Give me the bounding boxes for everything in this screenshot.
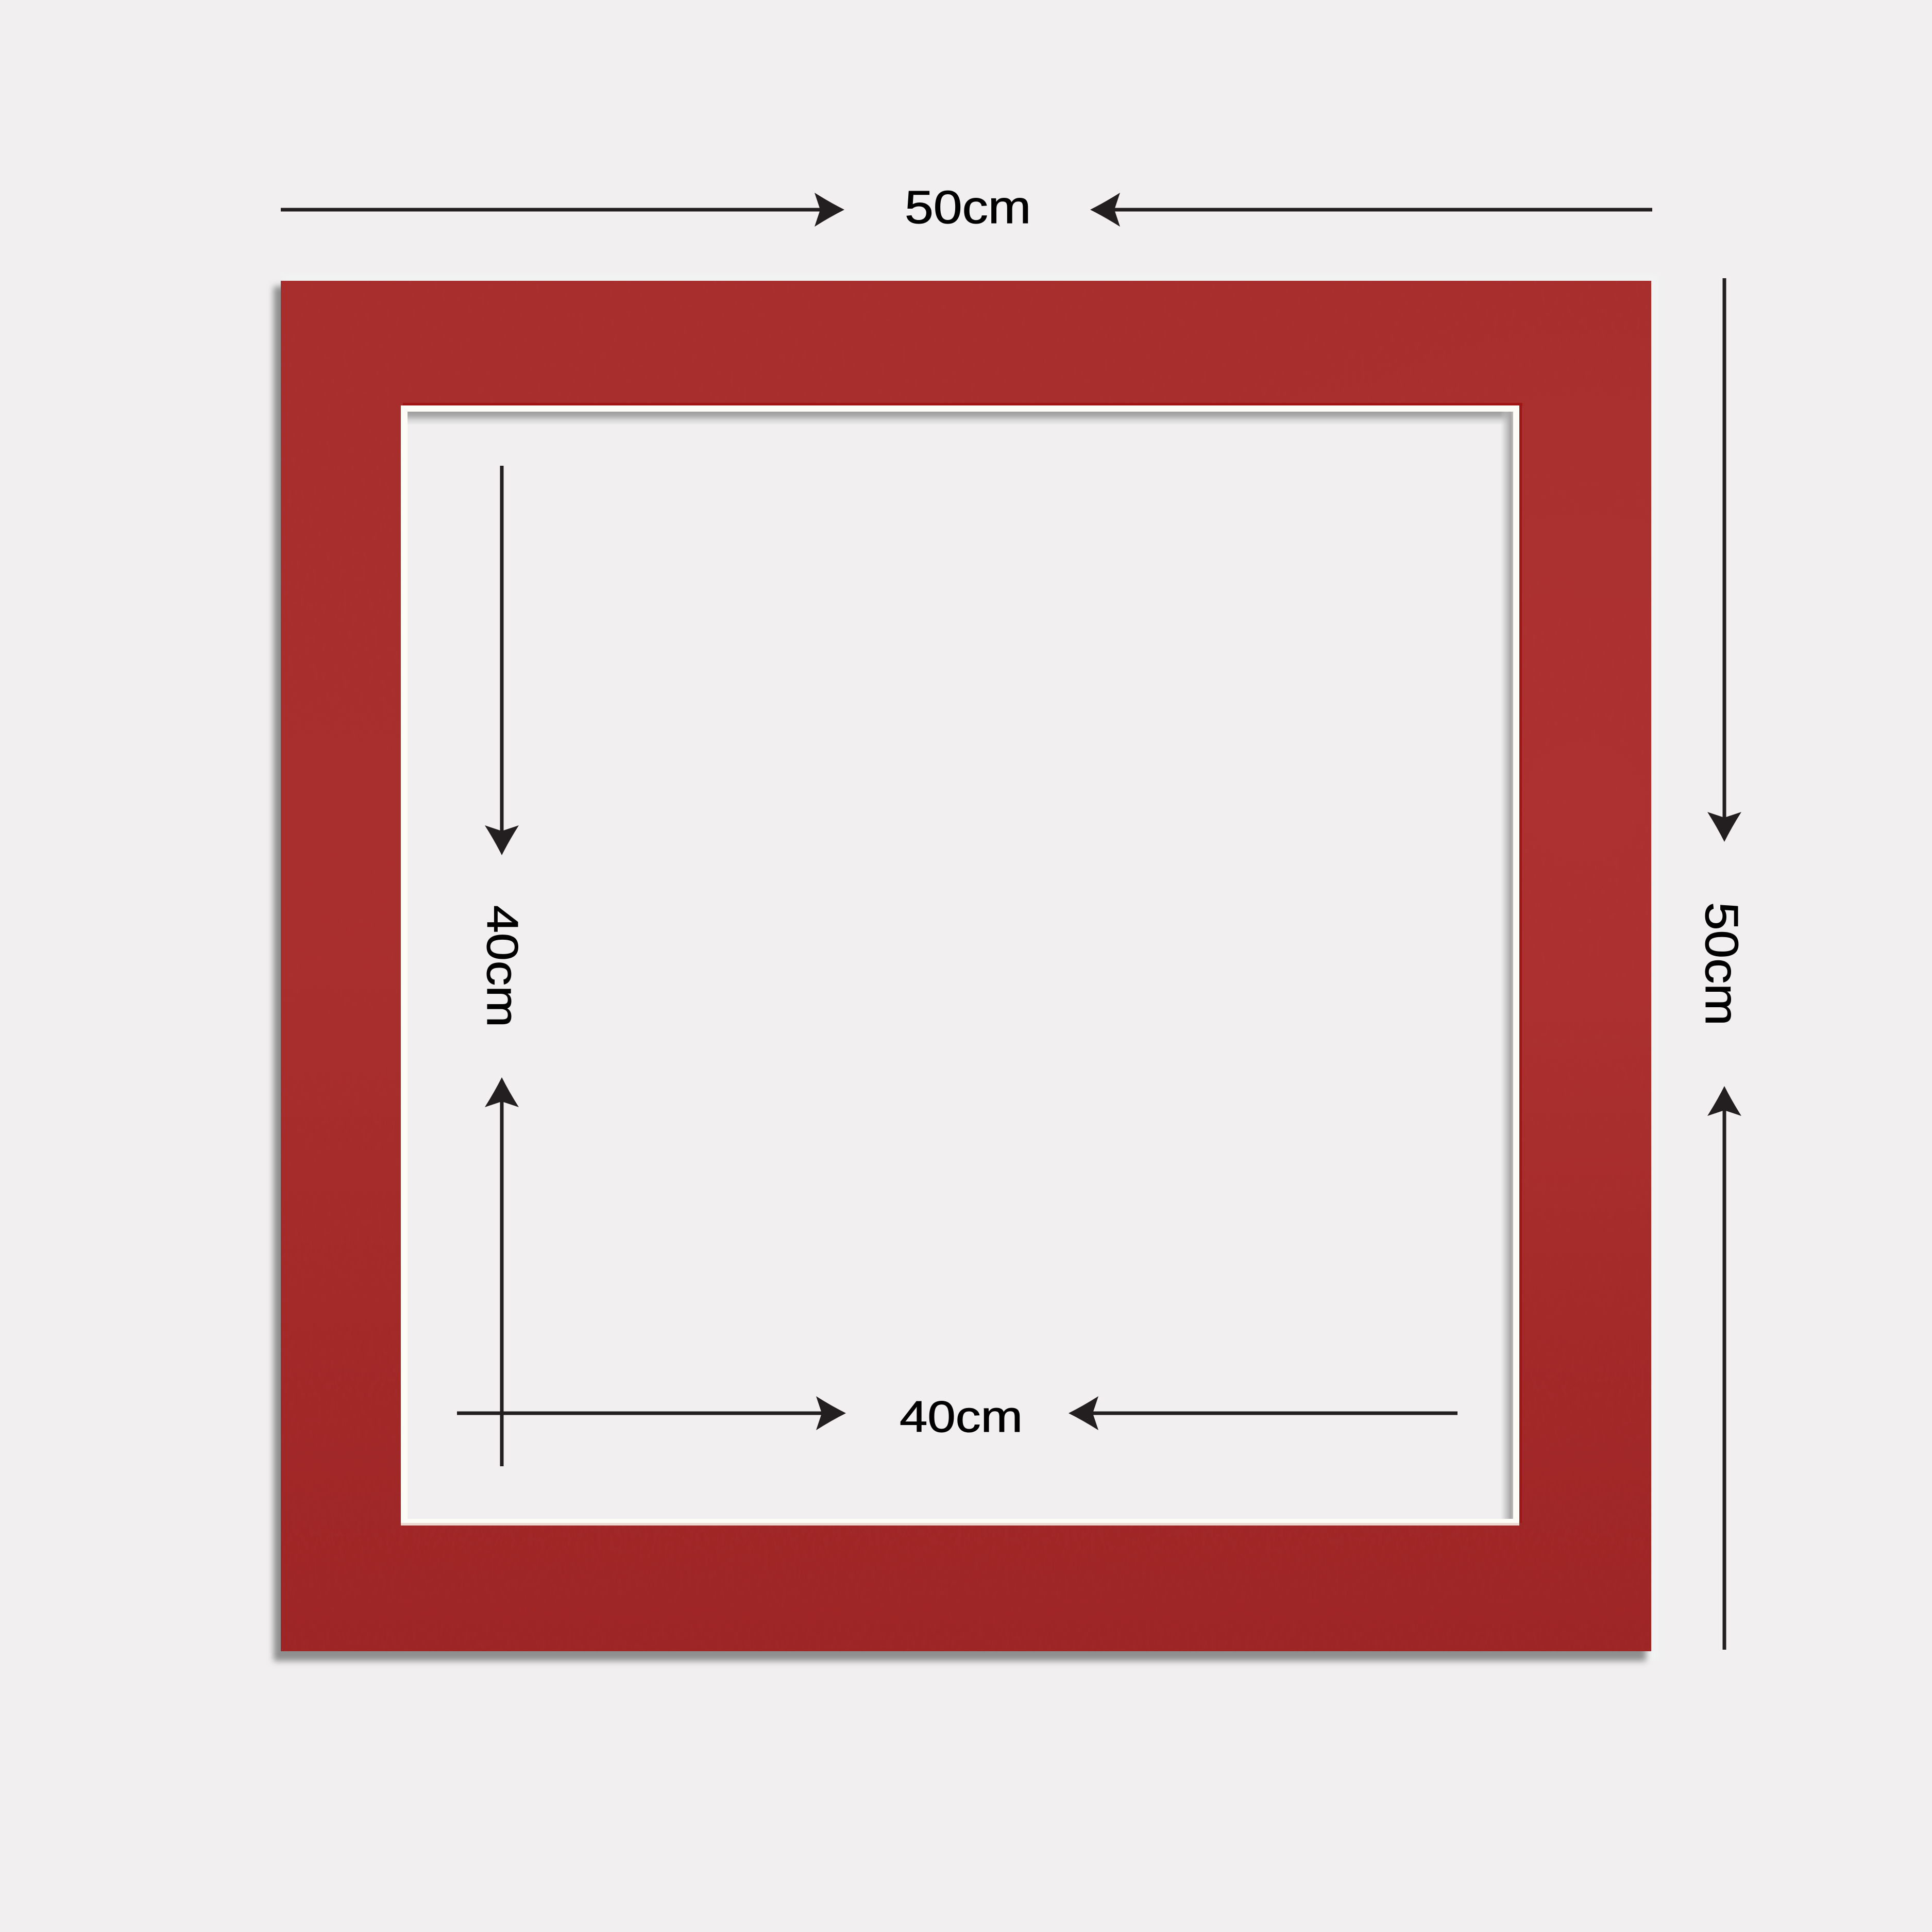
- panel: red mat board: [274, 274, 1659, 1661]
- frame drop shadow: [274, 286, 1646, 1661]
- top dimension: 50cm: [281, 182, 1652, 233]
- label: 50cm top: 50cm: [905, 182, 1031, 233]
- arrow: top left pointing right: [281, 193, 844, 227]
- right dimension: 50cm: [1696, 278, 1748, 1650]
- label: 40cm inner bottom: 40cm: [900, 1393, 1023, 1442]
- arrow: inner left pointing up: [485, 1077, 519, 1466]
- inner bottom dimension: 40cm: [457, 1393, 1458, 1442]
- arrow: right side pointing up: [1707, 1086, 1741, 1650]
- label: 40cm inner left: 40cm: [478, 905, 527, 1027]
- arrow: right side pointing down: [1707, 278, 1741, 842]
- frame surface: [281, 281, 1651, 1651]
- window opening with bevel: [401, 403, 1522, 1526]
- inner left dimension: 40cm: [478, 466, 527, 1466]
- arrow: inner left pointing down: [485, 466, 519, 855]
- label: 50cm right: 50cm: [1696, 902, 1748, 1026]
- arrow: top right pointing left: [1090, 193, 1652, 227]
- frame highlight halo: [282, 274, 1659, 1660]
- arrow: inner bottom pointing right: [457, 1396, 846, 1430]
- arrow: inner bottom pointing left: [1069, 1396, 1458, 1430]
